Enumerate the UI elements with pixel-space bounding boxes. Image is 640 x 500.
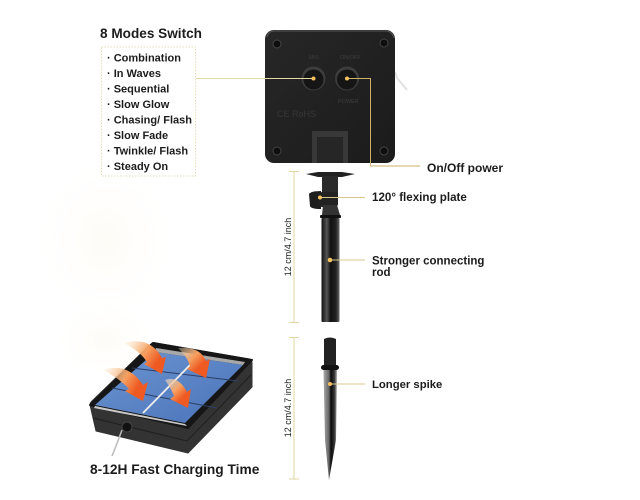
mode names (107, 52, 192, 173)
power button (335, 66, 359, 90)
embossed labels (277, 55, 361, 119)
label: on/off power: On/Off power (427, 161, 503, 175)
heading: 8 Modes Switch: 8 Modes Switch (100, 26, 202, 41)
leader dots (312, 76, 349, 80)
embossed labels: POWER (338, 99, 359, 105)
leader: spike (328, 382, 365, 386)
spike (321, 338, 339, 480)
background glow (30, 150, 180, 380)
mode names: · Slow Glow (107, 99, 170, 111)
controller box rear view (265, 30, 395, 163)
solar panel (90, 343, 252, 456)
label: stronger connecting rod: Stronger connecting (372, 256, 484, 268)
panel: modes list (102, 47, 196, 176)
screws (273, 39, 388, 155)
mode names: · Twinkle/ Flash (107, 146, 188, 158)
mode names: · Combination (107, 52, 181, 64)
leader: connecting rod (328, 258, 365, 262)
connecting rod (306, 172, 355, 322)
label: stronger connecting rod: rod (372, 267, 391, 279)
embossed labels: CE RoHS (277, 109, 316, 119)
label: flexing plate: 120° flexing plate (372, 191, 467, 204)
leader: modes to button (196, 78, 314, 80)
embossed labels: M/S (309, 55, 319, 61)
embossed labels: ON/OFF (340, 55, 361, 61)
dimension: rod height (283, 172, 299, 322)
icon: cable stub on controller (395, 72, 407, 90)
bracket notch (312, 131, 348, 163)
label: fast charging time: 8-12H Fast Charging Time (90, 462, 260, 477)
mode names: · Steady On (107, 161, 168, 173)
charging port and cable (112, 422, 132, 456)
mode names: · Chasing/ Flash (107, 114, 192, 126)
dimension: spike height (283, 338, 299, 479)
charging arrows (103, 341, 210, 408)
dimension: rod height: 12 cm/4.7 inch (283, 218, 293, 276)
panel grid lines (112, 368, 238, 408)
dimension: spike height: 12 cm/4.7 inch (283, 379, 293, 437)
mode button (302, 66, 326, 90)
label: longer spike: Longer spike (372, 379, 442, 391)
mode names: · Sequential (107, 84, 169, 96)
leader: power (347, 78, 420, 166)
leader: flexing plate (318, 196, 365, 200)
mode names: · Slow Fade (107, 130, 168, 142)
mode names: · In Waves (107, 68, 161, 80)
